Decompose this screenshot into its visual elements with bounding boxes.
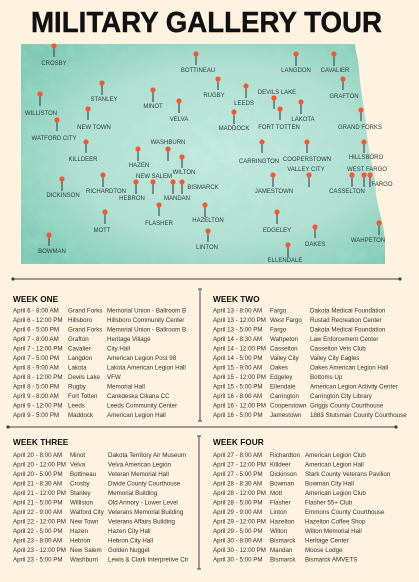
pin: New Town (77, 106, 111, 131)
pin: Cooperstown: COOPERSTOWN (283, 157, 331, 163)
heading: week four: WEEK FOUR (213, 437, 264, 447)
pin: Mandan (164, 179, 190, 202)
pin: Valley City (287, 167, 325, 187)
pin: Carrington (239, 139, 279, 165)
schedule rows: week one: Langdon (68, 355, 93, 362)
schedule rows: week one: April 9 - 12:00 PM (13, 402, 63, 410)
schedule rows: week one: Devils Lake (68, 374, 101, 381)
schedule rows: week three: Washburn (70, 556, 99, 564)
schedule rows: week two: West Fargo (270, 317, 302, 324)
schedule rows: week two: American Legion Activity Center (310, 384, 398, 390)
schedule rows: week one: Cankdeska Cikana CC (107, 393, 170, 400)
pin: Dickinson: DICKINSON (46, 193, 80, 199)
pin: Ellendale: ELLENDALE (268, 258, 302, 264)
schedule rows: week three: Hazen City Hall (108, 528, 151, 535)
schedule rows: week two: April 13 - 12:00 PM (213, 317, 266, 324)
pin: Hebron: HEBRON (119, 196, 145, 202)
pin: Richardton (86, 172, 126, 195)
pin: Williston (25, 91, 57, 117)
schedule rows: week three: Memorial Building (108, 490, 158, 497)
pin: Edgeley: EDGELEY (263, 228, 291, 234)
pin: Bismarck: BISMARCK (187, 185, 219, 191)
pin: Maddock: MADDOCK (219, 126, 249, 132)
pin: Cavalier: CAVALIER (321, 68, 350, 74)
schedule rows: week three: Veterans Memorial Building (108, 509, 184, 516)
pin: Rugby: RUGBY (203, 93, 225, 99)
pin: Dickinson (46, 176, 80, 199)
pin: Richardton: RICHARDTON (86, 189, 126, 195)
schedule rows: week two (213, 308, 407, 419)
schedule rows: week two: April 16 - 5:00 PM (213, 412, 263, 419)
heading: week one: WEEK ONE (13, 294, 59, 304)
schedule rows: week three: Velva American Legion (108, 462, 172, 468)
schedule rows: week three: April 21 - 8:30 AM (13, 480, 62, 488)
schedule rows: week three: April 23 - 8:00 AM (13, 538, 62, 544)
pin: Watford City: WATFORD CITY (32, 136, 76, 142)
pin: Hillsboro (349, 139, 383, 161)
schedule rows: week two: Rustad Recreation Center (310, 317, 382, 324)
panel: week one schedule (13, 294, 186, 419)
pin: Bottineau (181, 51, 215, 74)
pin: Oakes: OAKES (305, 242, 325, 248)
map of North Dakota with tour stops (21, 43, 393, 264)
pin: Langdon (281, 51, 311, 74)
pin: Crosby (41, 43, 67, 67)
schedule rows: week two: Ellendale (270, 384, 296, 390)
schedule rows: week two: April 15 - 12:00 PM (213, 374, 266, 381)
schedule rows: week four: Bismarck (270, 538, 296, 544)
pin: Casselton: CASSELTON (329, 189, 365, 195)
pin: Carrington: CARRINGTON (239, 159, 279, 165)
schedule rows: week two: April 13 - 8:00 AM (213, 308, 262, 314)
schedule rows: week four: Richardton (270, 452, 300, 459)
schedule rows: week three: New Town (70, 518, 99, 526)
schedule rows: week three: April 22 - 5:00 PM (13, 528, 63, 535)
pin: Hazen (129, 146, 149, 169)
schedule rows: week two: Jamestown (270, 412, 302, 419)
divider: middle horizontal rule (6, 425, 398, 429)
schedule rows: week two: Valley City Eagles (310, 355, 359, 362)
schedule rows: week two: Cooperstown (270, 402, 307, 410)
pin: Langdon: LANGDON (281, 68, 311, 74)
pin: Hazen: HAZEN (129, 163, 149, 169)
pin: Mott (94, 209, 111, 234)
pin: Grafton (329, 76, 359, 100)
schedule rows: week three: Williston (70, 500, 94, 506)
schedule rows: week four: Bismarck (270, 556, 296, 564)
pin: Watford City (32, 117, 76, 142)
pin: New Town: NEW TOWN (77, 125, 111, 131)
schedule rows: week three: Hebron (70, 538, 91, 544)
schedule rows: week two: April 14 - 8:30 AM (213, 336, 262, 343)
schedule rows: week four: American Legion Club (305, 452, 366, 459)
schedule rows: week four: April 30 - 5:00 PM (213, 556, 263, 564)
pin: Hebron (119, 179, 145, 202)
schedule rows: week four: Stark County Veterans Pavilion (305, 471, 391, 478)
pin: Grand Forks (338, 107, 382, 131)
schedule rows: week four (213, 452, 391, 564)
pin: Cavalier (321, 51, 350, 74)
pin: Jamestown: JAMESTOWN (255, 189, 293, 195)
pin: Leeds: LEEDS (234, 101, 254, 107)
pin: Rugby (203, 76, 225, 99)
pin: Minot: MINOT (143, 104, 163, 110)
schedule rows: week three: April 21 - 5:00 PM (13, 500, 63, 506)
schedule rows: week three: Golden Nugget (108, 547, 150, 554)
schedule rows: week two: April 16 - 8:00 AM (213, 393, 262, 400)
schedule rows: week three (13, 452, 188, 564)
heading: week three: WEEK THREE (13, 437, 69, 447)
schedule rows: week two: April 14 - 5:00 PM (213, 355, 263, 362)
schedule rows: week two: Oakes (270, 364, 288, 372)
pin: Wahpeton: WAHPETON (351, 238, 385, 244)
schedule rows: week one: American Legion Post 98 (107, 355, 177, 362)
schedule rows: week three: Veteran Memorial Hall (108, 471, 169, 478)
pin: Fort Totten (258, 106, 300, 131)
pin: Bowman (38, 232, 66, 255)
schedule rows: week one: Cavalier (68, 346, 91, 352)
schedule rows: week one: Heritage Village (107, 336, 151, 343)
map shape (21, 44, 385, 264)
schedule rows: week three: Crosby (70, 480, 91, 488)
pin: Killdeer (68, 139, 98, 163)
pin: Ellendale (268, 242, 302, 264)
pin: Oakes (305, 224, 325, 248)
schedule rows: week one: April 8 - 5:00 PM (13, 384, 59, 390)
divider: upper vertical rule (198, 289, 202, 421)
pin: Flasher: FLASHER (145, 221, 173, 227)
pin: Wahpeton (351, 220, 385, 244)
schedule rows: week three: Stanley (70, 490, 92, 497)
schedule rows: week two: Dakota Medical Foundation (310, 308, 386, 314)
pin: Velva: VELVA (170, 117, 188, 123)
schedule rows: week four: Killdeer (270, 462, 291, 468)
panel: week two schedule (213, 294, 407, 419)
pin: Fargo: FARGO (371, 182, 393, 188)
schedule rows: week one: April 8 - 12:00 PM (13, 374, 63, 381)
schedule rows: week two: April 13 - 5:00 PM (213, 326, 263, 334)
schedule rows: week four: April 27 - 5:00 PM (213, 471, 263, 478)
schedule rows: week three: Velva (70, 462, 86, 468)
pin: Washburn: WASHBURN (151, 140, 185, 146)
schedule rows: week four: Hazelton Coffee Shop (305, 518, 366, 526)
pin: Jamestown (255, 172, 293, 195)
schedule rows: week two: April 15 - 9:00 AM (213, 364, 262, 372)
pin: Minot (143, 87, 163, 110)
pin: Wilton (173, 154, 195, 176)
pin: Hillsboro: HILLSBORO (349, 155, 383, 161)
schedule rows: week two: Griggs County Courthouse (310, 402, 384, 410)
pin: Bowman: BOWMAN (38, 249, 66, 255)
pin: Linton (196, 228, 218, 251)
schedule rows: week two: Carrington (270, 393, 299, 400)
schedule rows: week one: Maddock (68, 412, 94, 419)
pin: Bismarck (179, 179, 219, 194)
schedule rows: week four: April 29 - 12:00 PM (213, 518, 266, 526)
pin: New Salem: NEW SALEM (136, 174, 172, 180)
schedule rows: week one: April 6 - 5:00 PM (13, 326, 59, 334)
schedule rows: week three: Watford City (70, 509, 105, 516)
schedule rows: week two: Casselton Vets Club (310, 346, 366, 352)
pin: West Fargo: WEST FARGO (347, 167, 387, 173)
schedule rows: week two: Casselton (270, 346, 298, 352)
schedule rows: week three: Minot (70, 452, 85, 459)
schedule rows: week three: April 22 - 9:00 AM (13, 509, 62, 516)
schedule rows: week one: April 7 - 5:00 PM (13, 355, 59, 362)
schedule rows: week two: Oakes American Legion Hall (310, 364, 388, 372)
schedule rows: week three: Hazen (70, 528, 88, 535)
schedule rows: week three: April 20 - 5:00 PM (13, 471, 63, 478)
schedule rows: week three: Hebron City Hall (108, 538, 153, 544)
pin: Flasher (145, 202, 173, 227)
schedule rows: week one: Leeds (68, 402, 85, 410)
schedule rows: week four: April 29 - 5:00 PM (213, 528, 263, 535)
schedule rows: week two: Valley City (270, 355, 300, 362)
schedule rows: week four: Wilton (270, 528, 288, 535)
schedule rows: week one: Lakota American Legion Hall (107, 364, 186, 372)
divider: top horizontal rule (11, 277, 402, 281)
schedule rows: week four: Bowman (270, 480, 295, 488)
schedule rows: week one: Grafton (68, 336, 89, 343)
schedule rows: week one: Memorial Union - Ballroom B (107, 308, 186, 314)
panel: week four schedule (213, 437, 391, 564)
schedule rows: week four: April 27 - 12:00 PM (213, 462, 266, 468)
pin: Williston: WILLISTON (25, 111, 57, 117)
schedule rows: week three: Divide County Courthouse (108, 480, 181, 488)
schedule rows: week one: Hillsboro Community Center (107, 317, 184, 324)
schedule rows: week one: April 8 - 9:00 AM (13, 364, 59, 372)
pin: Hazelton (192, 202, 224, 224)
pin: Washburn (151, 140, 185, 161)
schedule rows: week one: Hillsboro (68, 317, 93, 324)
schedule rows: week four: Flasher (270, 500, 291, 506)
schedule rows: week four: April 28 - 5:00 PM (213, 500, 263, 506)
schedule rows: week four: Wilton Memorial Hall (305, 528, 362, 535)
schedule rows: week one: April 7 - 12:00 PM (13, 346, 63, 352)
schedule rows: week four: Dickinson (270, 471, 297, 478)
pin: Mandan: MANDAN (164, 196, 190, 202)
schedule rows: week three: April 21 - 12:00 PM (13, 490, 66, 497)
pin: Grafton: GRAFTON (329, 94, 359, 100)
pin: Lakota: LAKOTA (291, 117, 315, 123)
schedule rows: week four: April 28 - 8:30 AM (213, 480, 262, 488)
pin: Edgeley (263, 209, 291, 234)
schedule rows: week one: April 9 - 8:00 AM (13, 393, 59, 400)
schedule rows: week three: Lewis & Clark Interpretive Ctr (108, 556, 188, 564)
pin: Valley City: VALLEY CITY (287, 167, 325, 173)
schedule rows: week four: April 30 - 8:00 AM (213, 538, 262, 544)
pin: Maddock (219, 109, 249, 132)
heading: week two: WEEK TWO (213, 294, 260, 304)
pin: Casselton (329, 172, 365, 195)
schedule rows: week three: April 22 - 12:00 PM (13, 518, 66, 526)
schedule rows: week one: City Hall (107, 346, 130, 352)
schedule rows: week two: April 14 - 12:00 PM (213, 346, 266, 352)
schedule rows: week four: American Legion Club (305, 490, 366, 497)
pin: Stanley: STANLEY (91, 97, 117, 103)
pin: Fort Totten: FORT TOTTEN (258, 125, 300, 131)
schedule rows: week two: Fargo (270, 326, 287, 334)
pin: Cooperstown (283, 139, 331, 163)
schedule rows: week one: Memorial Union - Ballroom B (107, 326, 186, 334)
schedule rows: week two: April 15 - 5:00 PM (213, 384, 263, 390)
pin: Lakota (291, 99, 315, 123)
schedule rows: week four: Bowman City Hall (305, 480, 354, 488)
schedule rows: week three: Old Armory - Lower Level (108, 500, 178, 506)
schedule rows: week two: Edgeley (270, 374, 293, 381)
schedule rows: week four: Hazelton (270, 518, 295, 526)
schedule rows: week two: Wahpeton (270, 336, 299, 343)
pin: Leeds (234, 83, 254, 107)
schedule rows: week three: Veterans Affairs Building (108, 518, 176, 526)
schedule rows: week four: Mott (270, 490, 282, 497)
schedule rows: week one: Grand Forks (68, 326, 102, 334)
pin: Bottineau: BOTTINEAU (181, 68, 215, 74)
schedule rows: week two: 1883 Stutsman County Courthouse (310, 412, 407, 419)
schedule rows: week four: April 29 - 9:00 AM (213, 509, 262, 516)
schedule rows: week one: April 6 - 12:00 PM (13, 317, 63, 324)
pin: Hazelton: HAZELTON (192, 218, 224, 224)
pin: New Salem (136, 174, 172, 194)
pin: Crosby: CROSBY (41, 61, 67, 67)
pin: Wilton: WILTON (173, 170, 195, 176)
schedule rows: week one: April 6 - 8:00 AM (13, 308, 59, 314)
schedule rows: week one: Grand Forks (68, 308, 102, 314)
schedule rows: week four: Bismarck AMVETS (305, 556, 357, 564)
schedule rows: week one: Fort Totten (68, 393, 98, 400)
schedule rows: week one: Lakota (68, 364, 87, 372)
schedule rows: week three: New Salem (70, 547, 102, 554)
schedule rows: week one: VFW (107, 374, 121, 381)
schedule rows: week four: Mandan (270, 547, 293, 554)
schedule rows: week two: Dakota Medical Foundation (310, 326, 386, 334)
schedule rows: week four: Moose Lodge (305, 547, 343, 554)
schedule rows: week one: American Legion Hall (107, 412, 166, 419)
schedule rows: week four: Heritage Center (305, 538, 349, 544)
divider: lower vertical rule (197, 436, 201, 569)
pin: Killdeer: KILLDEER (68, 157, 98, 163)
pin: West Fargo (347, 167, 387, 187)
schedule rows: week two: Carrington City Library (310, 393, 373, 400)
pin: Devils Lake (258, 90, 296, 109)
schedule rows: week four: Emmons County Courthouse (305, 509, 385, 516)
schedule rows: week two: April 16 - 12:00 PM (213, 402, 266, 410)
schedule rows: week one: April 9 - 5:00 PM (13, 412, 59, 419)
pin: Fargo (367, 172, 393, 188)
pin: Devils Lake: DEVILS LAKE (258, 90, 296, 96)
schedule rows: week two: Fargo (270, 308, 287, 314)
schedule rows: week three: April 23 - 5:00 PM (13, 556, 63, 564)
schedule rows: week two: Bottoms Up (310, 374, 343, 381)
title: MILITARY GALLERY TOUR (31, 7, 382, 39)
schedule rows: week one: April 7 - 8:00 AM (13, 336, 59, 343)
schedule rows: week four: April 30 - 12:00 PM (213, 547, 266, 554)
schedule rows: week four: April 28 - 12:00 PM (213, 490, 266, 497)
schedule rows: week three: April 20 - 8:00 AM (13, 452, 62, 459)
pin: Velva (170, 98, 188, 123)
schedule rows: week three: April 23 - 12:00 PM (13, 547, 66, 554)
schedule rows: week three: Bottineau (70, 471, 97, 478)
schedule rows: week one: Memorial Hall (107, 384, 145, 390)
schedule rows: week two: Law Enforcement Center (310, 336, 378, 343)
schedule rows: week four: Flasher 55+ Club (305, 500, 353, 506)
schedule rows: week one: Leeds Community Center (107, 402, 177, 410)
schedule rows: week four: April 27 - 8:00 AM (213, 452, 262, 459)
pin: Grand Forks: GRAND FORKS (338, 125, 382, 131)
schedule rows: week four: American Legion Hall (305, 462, 364, 468)
pin: Stanley (91, 80, 117, 103)
schedule rows: week one: Rugby (68, 384, 87, 390)
schedule rows: week three: April 20 - 12:00 PM (13, 462, 66, 468)
schedule rows: week four: Linton (270, 509, 287, 516)
pin: Mott: MOTT (94, 228, 111, 234)
panel: week three schedule (13, 437, 188, 564)
pin: Linton: LINTON (196, 245, 218, 251)
schedule rows: week three: Dakota Territory Air Museum (108, 452, 186, 459)
schedule rows: week one (13, 308, 186, 419)
